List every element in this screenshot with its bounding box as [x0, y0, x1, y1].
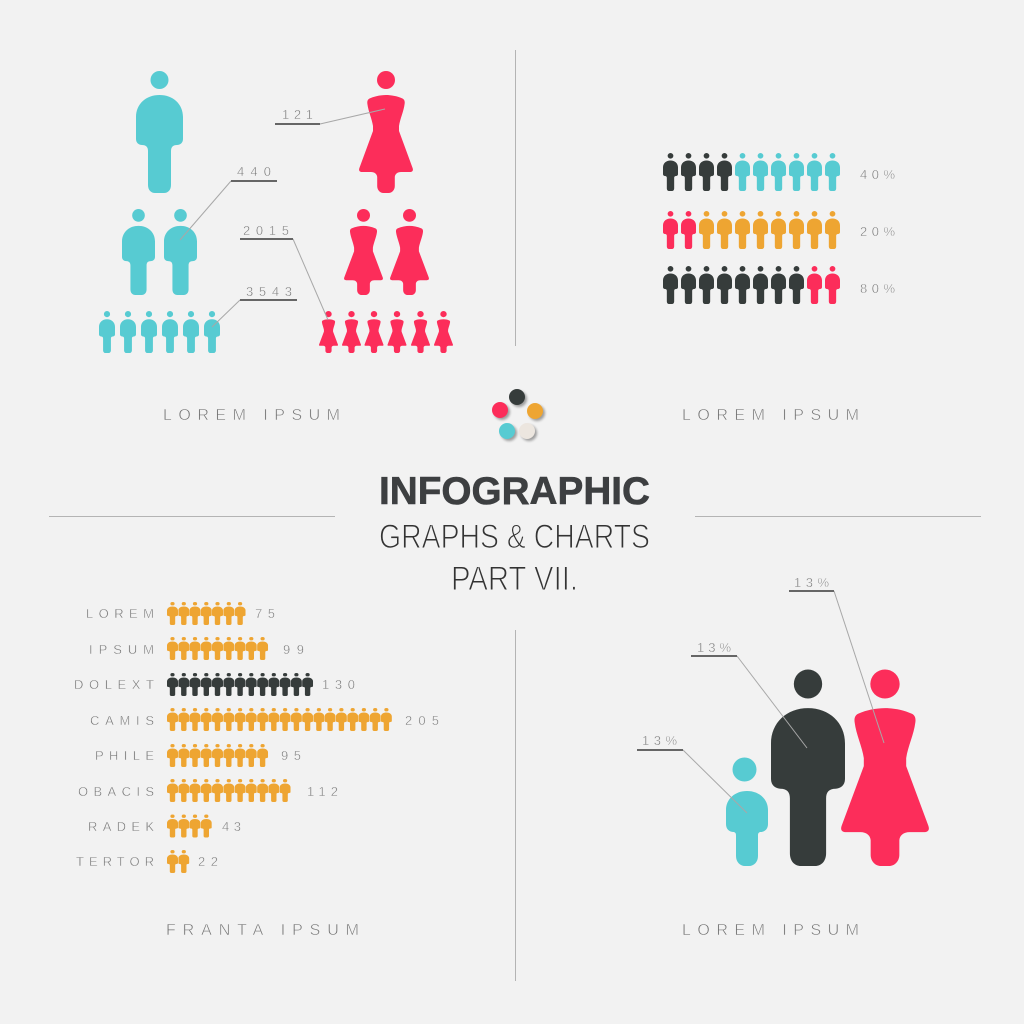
subtitle line 2: PART VII. [451, 560, 578, 598]
row: 80%: 80% [860, 281, 895, 296]
row: CAMIS 205: 205 [405, 713, 439, 728]
row: 20% [663, 211, 895, 249]
row: IPSUM 99 [89, 637, 304, 660]
row: DOLEXT 130: 130 [322, 677, 355, 692]
row: PHILE 95: 95 [281, 748, 301, 763]
callout: 3543 [212, 284, 297, 327]
panel: people pyramid by gender [99, 71, 453, 424]
row: TERTOR 22: TERTOR [76, 854, 154, 869]
row: 40%: 40% [860, 167, 895, 182]
callout: 3543: 3543 [246, 284, 292, 299]
row: TERTOR 22: 22 [198, 854, 218, 869]
callout: woman 13% [789, 575, 884, 743]
row: LOREM 75: 75 [255, 606, 275, 621]
callout: man 13%: 13% [697, 640, 731, 655]
title: INFOGRAPHIC [379, 470, 650, 513]
callout: man 13% [691, 640, 807, 748]
row: OBACIS 112 [78, 779, 338, 802]
row: 80% [663, 266, 895, 304]
caption: bottom right: LOREM IPSUM [682, 922, 859, 939]
callout: 440: 440 [237, 164, 271, 179]
callout: 2015 [240, 223, 328, 320]
title block [379, 470, 650, 598]
subtitle line 1: GRAPHS & CHARTS [379, 518, 650, 556]
icon: woman [841, 670, 929, 866]
caption: top left: LOREM IPSUM [163, 407, 340, 424]
row: OBACIS 112: OBACIS [78, 784, 154, 799]
row: LOREM 75 [86, 602, 275, 625]
row: CAMIS 205: CAMIS [90, 713, 154, 728]
row: 20%: 20% [860, 224, 895, 239]
caption: bottom left: FRANTA IPSUM [166, 922, 359, 939]
icon: five coloured dots [492, 389, 545, 441]
icon: child [726, 758, 768, 866]
row: 40% [663, 153, 895, 191]
panel: family figures [637, 575, 929, 939]
panel: percentage people rows [663, 153, 895, 424]
row: DOLEXT 130: DOLEXT [74, 677, 154, 692]
row: RADEK 43 [88, 814, 241, 838]
row: CAMIS 205 [90, 708, 439, 731]
callout: child 13%: 13% [642, 733, 677, 748]
red women pyramid [319, 71, 453, 353]
row: IPSUM 99: IPSUM [89, 642, 154, 657]
callout: 2015: 2015 [243, 223, 289, 238]
row: PHILE 95 [95, 744, 301, 767]
callout: 121 [275, 107, 385, 124]
icon: man [771, 670, 845, 866]
callout: child 13% [637, 733, 747, 813]
row: DOLEXT 130 [74, 673, 355, 696]
row: RADEK 43: RADEK [88, 819, 154, 834]
row: LOREM 75: LOREM [86, 606, 154, 621]
caption: top right: LOREM IPSUM [682, 407, 859, 424]
panel: horizontal people bar chart [74, 602, 439, 939]
callout: 440 [180, 164, 277, 240]
row: TERTOR 22 [76, 850, 218, 873]
row: RADEK 43: 43 [222, 819, 241, 834]
row: OBACIS 112: 112 [307, 784, 338, 799]
row: IPSUM 99: 99 [283, 642, 304, 657]
callout: 121: 121 [282, 107, 313, 122]
row: PHILE 95: PHILE [95, 748, 154, 763]
callout: woman 13%: 13% [794, 575, 829, 590]
teal men pyramid [99, 71, 220, 353]
